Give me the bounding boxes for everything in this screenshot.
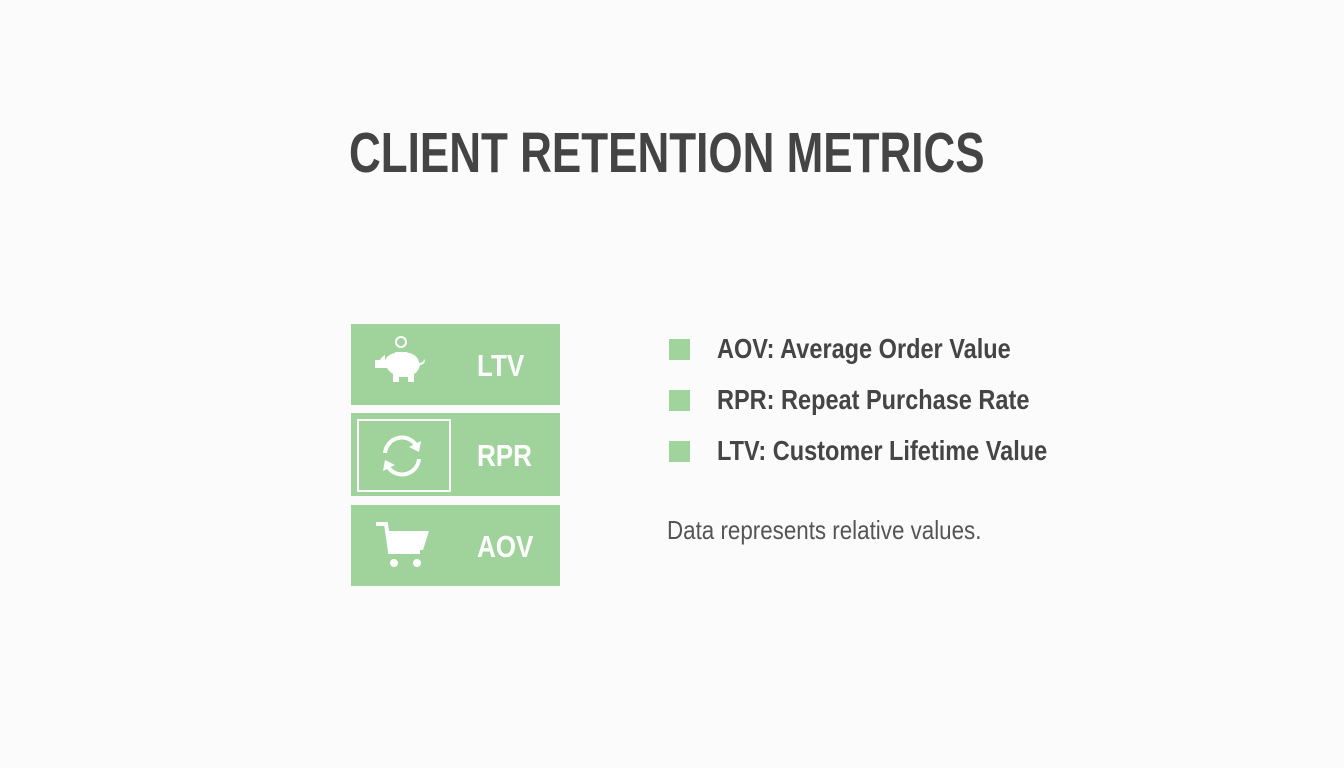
title: CLIENT RETENTION METRICS [349,121,985,185]
tile: AOV [351,505,560,586]
tile: RPR [351,413,560,496]
icon: piggy bank [375,336,425,382]
footnote: Data represents relative values. [667,515,981,545]
panel: metric tiles [351,324,560,586]
tile: LTV: LTV [477,348,524,383]
icon: refresh cycle [383,436,421,476]
legend [669,333,1047,466]
tile: RPR: RPR [477,438,532,473]
legend item: LTV: LTV: Customer Lifetime Value [717,435,1047,466]
tile: LTV [351,324,560,405]
legend item: RPR: RPR: Repeat Purchase Rate [717,384,1029,415]
icon: shopping cart [376,522,429,567]
tile: AOV: AOV [477,529,533,564]
legend item: AOV: AOV: Average Order Value [717,333,1011,364]
